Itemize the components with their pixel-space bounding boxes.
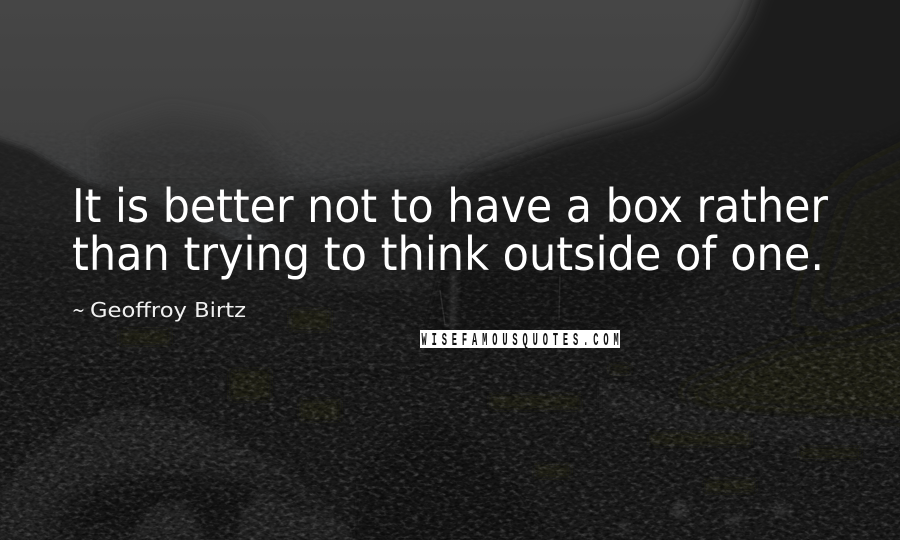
left mountain <box>0 130 300 320</box>
right green slope <box>610 195 900 420</box>
tilde: ~ <box>72 298 85 322</box>
quote line 1: It is better not to have a box rather <box>72 179 828 233</box>
watermark badge <box>420 330 620 351</box>
moss patches <box>120 310 860 492</box>
right mountain <box>420 0 900 330</box>
waterfalls <box>451 272 456 328</box>
author name: Geoffroy Birtz <box>90 298 246 322</box>
dark cliff behind waterfall <box>420 270 710 350</box>
valley back <box>250 155 660 340</box>
author attribution <box>72 298 246 322</box>
rock texture <box>0 172 900 540</box>
quote line 2: than trying to think outside of one. <box>72 227 824 281</box>
quote text <box>72 179 828 281</box>
stream bed <box>600 380 900 445</box>
sky fog <box>0 0 900 240</box>
foreground rocks: central boulder <box>355 420 540 540</box>
ground <box>0 290 900 540</box>
watermark text: WISEFAMOUSQUOTES.COM <box>422 331 619 351</box>
middle misty peak <box>100 112 360 240</box>
foreground rocks: left boulder <box>0 405 330 540</box>
pale stones <box>619 502 790 533</box>
